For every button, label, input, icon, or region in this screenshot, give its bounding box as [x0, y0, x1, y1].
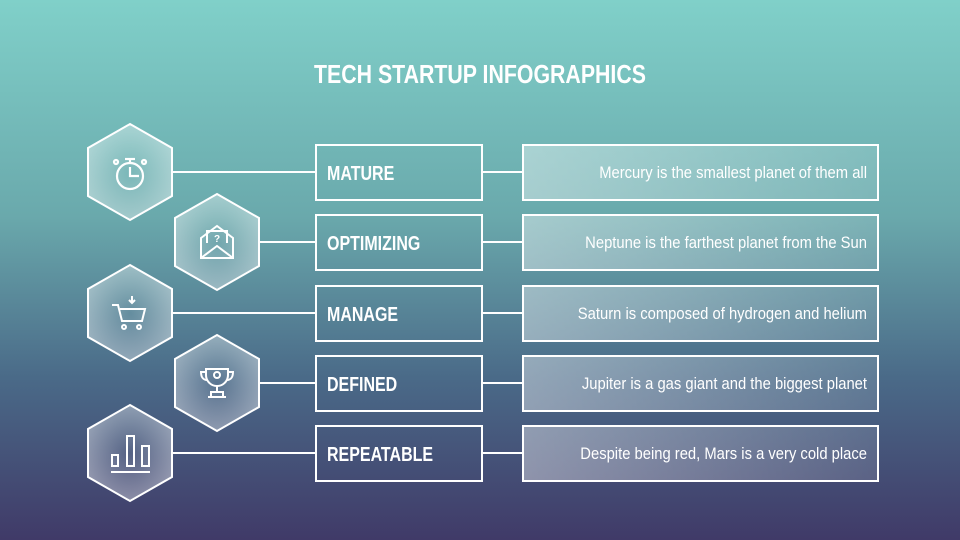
- desc: mercury: [523, 145, 878, 200]
- label: repeatable: REPEATABLE: [327, 443, 433, 465]
- label: defined: [316, 356, 482, 411]
- descriptions: [523, 145, 878, 481]
- label: repeatable: [316, 426, 482, 481]
- desc: mars: [523, 426, 878, 481]
- icon hexagon: trophy: [175, 335, 259, 431]
- labels: [316, 145, 482, 481]
- icon hexagon: cart: [88, 265, 172, 361]
- label: mature: [316, 145, 482, 200]
- icon hexagon: stopwatch: [88, 124, 172, 220]
- icon hexagon: envelope: [175, 194, 259, 290]
- desc: saturn: Saturn is composed of hydrogen and helium: [578, 305, 867, 323]
- icon hexagon: bar chart: [88, 405, 172, 501]
- label: manage: MANAGE: [327, 303, 398, 325]
- desc: mercury: Mercury is the smallest planet of them all: [599, 164, 867, 182]
- desc: neptune: Neptune is the farthest planet from the Sun: [585, 234, 867, 252]
- label: defined: DEFINED: [327, 373, 397, 395]
- desc: jupiter: [523, 356, 878, 411]
- title: TECH STARTUP INFOGRAPHICS: [314, 60, 646, 90]
- desc: saturn: [523, 286, 878, 341]
- desc: neptune: [523, 215, 878, 270]
- label: manage: [316, 286, 482, 341]
- label: optimizing: OPTIMIZING: [327, 232, 420, 254]
- desc: mars: Despite being red, Mars is a very cold place: [580, 445, 867, 463]
- desc: jupiter: Jupiter is a gas giant and the biggest planet: [582, 375, 868, 393]
- label: mature: MATURE: [327, 162, 394, 184]
- label: optimizing: [316, 215, 482, 270]
- icon hexagon: envelope: ?: [214, 234, 220, 245]
